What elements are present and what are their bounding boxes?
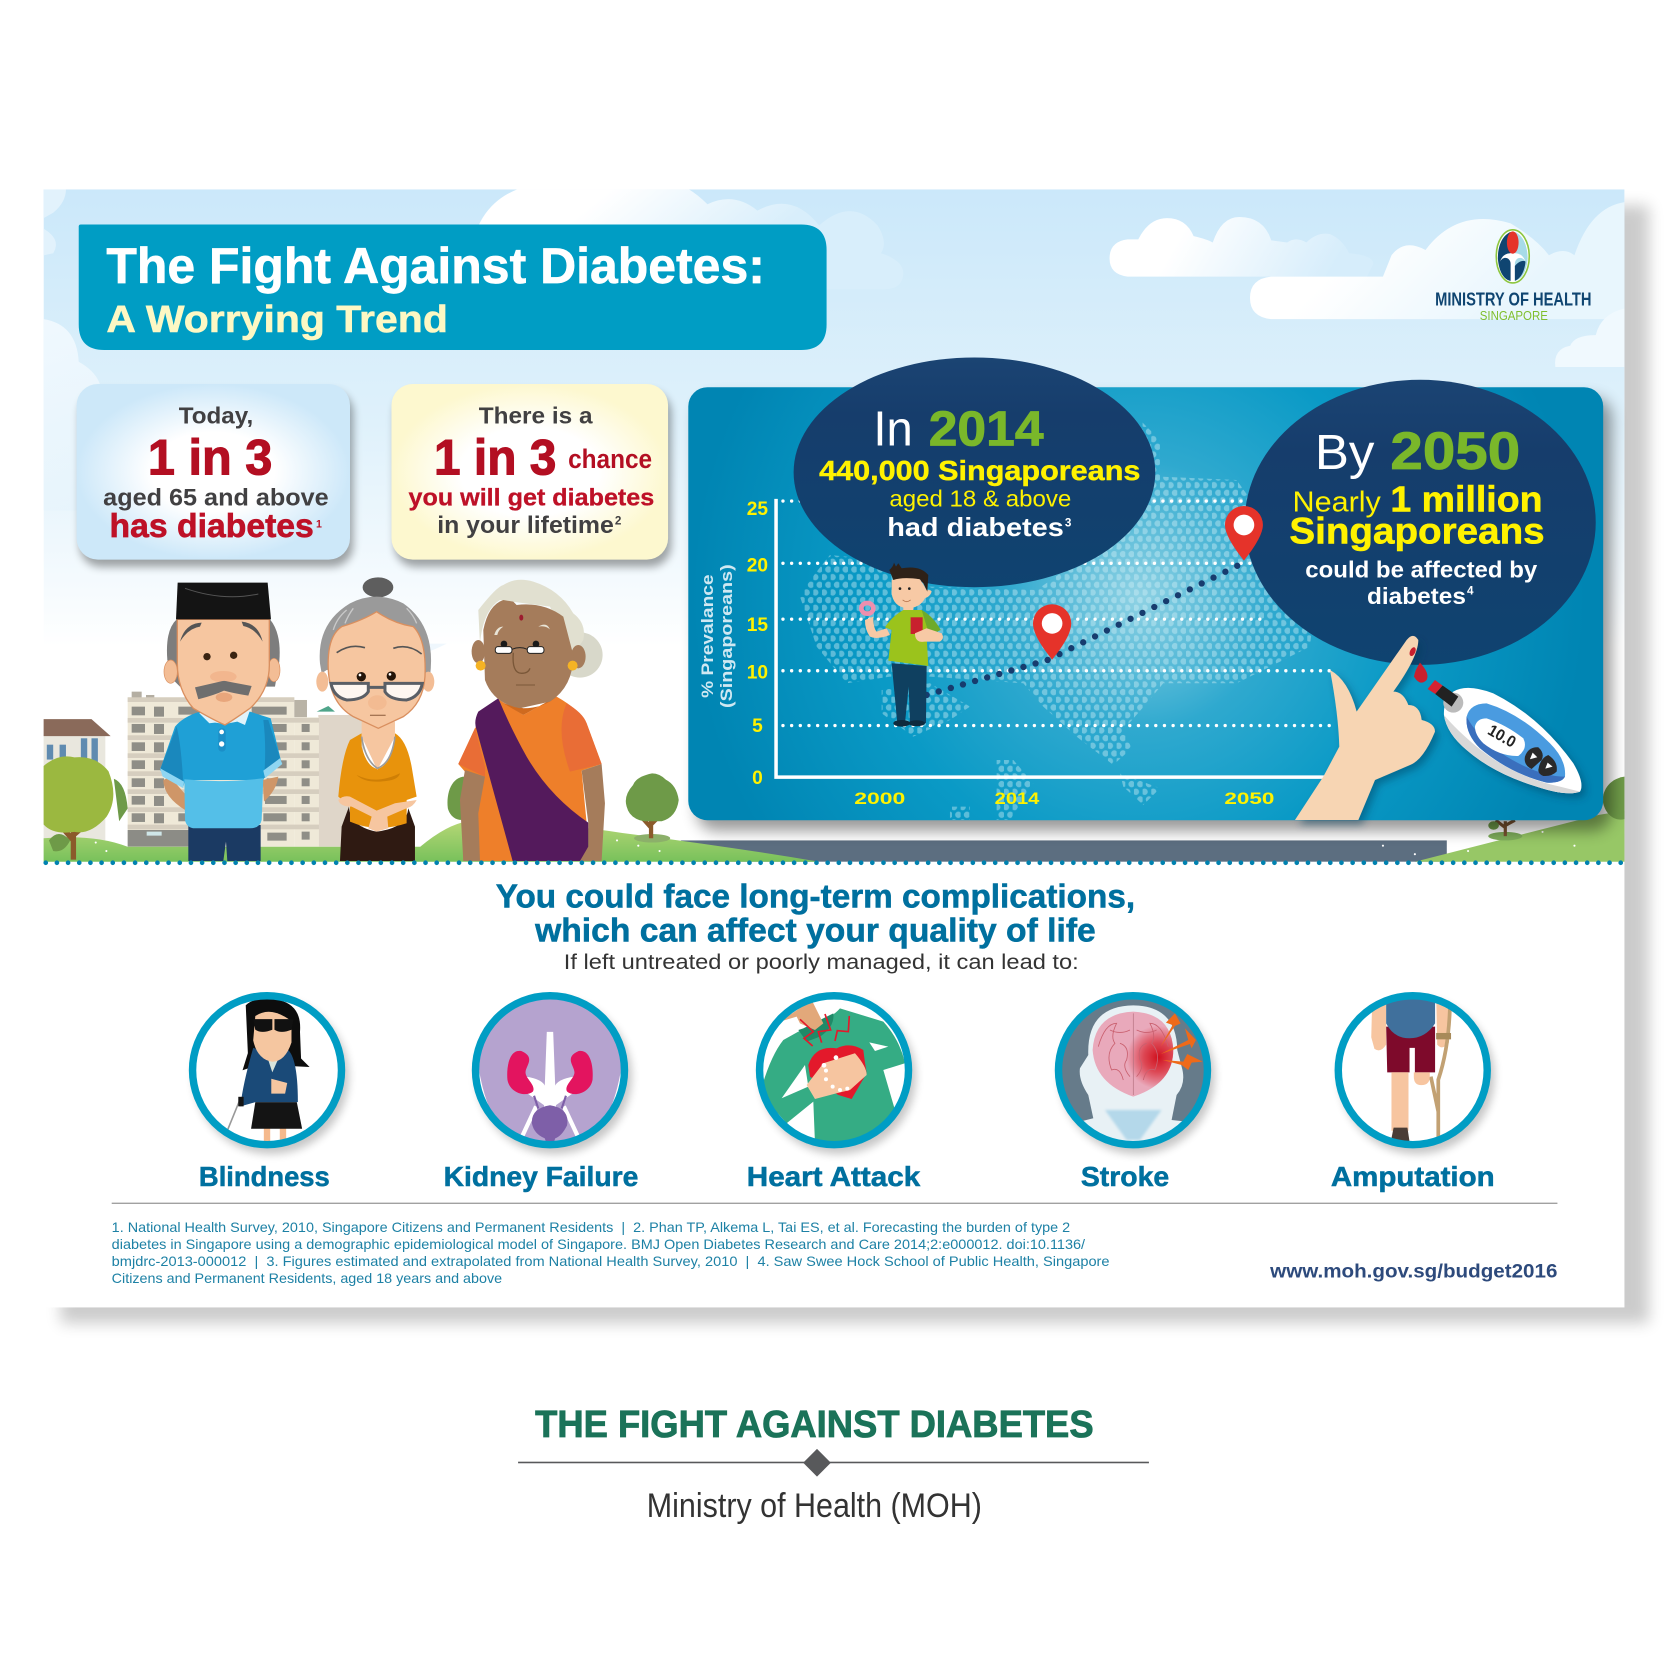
callout: By 2050 <box>1245 380 1596 665</box>
trend line <box>927 566 1238 695</box>
pin: 2050 <box>1225 506 1263 561</box>
poster card <box>44 189 1624 1307</box>
icon: kidneys and bladder <box>476 1032 624 1147</box>
fingernail <box>1408 646 1417 657</box>
footnotes: Citizens and Permanent Residents, aged 18 years and above <box>112 1270 502 1286</box>
x axis labels: 2014 <box>995 789 1040 808</box>
tree: right small <box>1488 820 1522 840</box>
callout: By 2050: could be affected by <box>1305 557 1537 583</box>
title text: The Fight Against Diabetes: <box>106 238 765 294</box>
stat card: 1 in 3 chance: chance <box>568 444 652 474</box>
x axis labels <box>854 789 1274 808</box>
logo text: MINISTRY OF HEALTH <box>1435 289 1591 309</box>
y axis title <box>698 564 736 708</box>
subheading: If left untreated or poorly managed, it can lead to: <box>564 950 1079 974</box>
heading: complications: which can affect your quality of life <box>534 911 1096 948</box>
caption title: THE FIGHT AGAINST DIABETES <box>535 1403 1094 1446</box>
tree: small behind woman <box>447 777 465 820</box>
background buildings and road <box>44 692 1447 862</box>
caption divider with diamond <box>518 1449 1149 1477</box>
glucose meter: 10.0 <box>1485 722 1519 751</box>
label: Kidney Failure <box>444 1161 638 1192</box>
callout: By 2050: Singaporeans <box>1289 510 1545 552</box>
road <box>681 840 1447 862</box>
building: house <box>44 719 111 840</box>
dotted world map <box>800 420 1317 820</box>
subtitle text: A Worrying Trend <box>106 298 448 341</box>
y axis labels: 5 <box>752 716 763 737</box>
stat card: 1 in 3 chance: you will get diabetes <box>409 484 654 511</box>
stat card: today 1 in 3: Today, <box>179 402 253 428</box>
heading: complications <box>496 877 1135 948</box>
stat card: 1 in 3 chance <box>391 384 671 567</box>
heading: complications: You could face long-term complications, <box>496 877 1135 914</box>
hand <box>1295 636 1435 820</box>
label: Stroke <box>1081 1161 1169 1192</box>
callout: In 2014 <box>794 357 1155 587</box>
icon: brain and head <box>1080 1005 1203 1147</box>
y axis labels: 20 <box>747 555 768 576</box>
callout: By 2050: diabetes <box>1367 583 1466 609</box>
icon: leg with crutch <box>1371 994 1451 1149</box>
complication: blindness <box>193 996 349 1192</box>
complication: kidney failure <box>444 996 638 1192</box>
character: boy with donut and soda <box>861 563 943 727</box>
stat card: 1 in 3 chance: 2 <box>615 514 622 527</box>
footnotes: diabetes in Singapore using a demographic epidemiological model of Singapore. BMJ Open Diabetes Research and Care 2014;2:e000012. doi:10.1136/ <box>112 1236 1085 1252</box>
x axis labels: 2000 <box>854 789 905 808</box>
label: Heart Attack <box>747 1161 921 1192</box>
callout: By 2050: 2050 <box>1390 422 1520 481</box>
y axis title: (Singaporeans) <box>717 564 736 708</box>
sky background with clouds <box>44 190 1624 651</box>
panel shadow <box>697 398 1612 831</box>
logo sub text: SINGAPORE <box>1480 308 1548 323</box>
character: elderly Indian woman <box>458 580 605 861</box>
stat card: 1 in 3 chance: 1 in 3 <box>434 429 556 485</box>
stat card: 1 in 3 chance: in your lifetime <box>437 512 614 539</box>
stat card: today 1 in 3: 1 <box>316 519 322 531</box>
callout: By 2050: By <box>1315 426 1375 480</box>
callout: By 2050: 1 million <box>1390 479 1543 520</box>
tree: large left <box>44 756 128 860</box>
callout: In 2014: 2014 <box>929 403 1044 457</box>
chart grid lines <box>783 501 1336 726</box>
callout: In 2014: had diabetes <box>887 514 1064 542</box>
icon: woman with cane <box>228 999 310 1147</box>
stat card: 1 in 3 chance: There is a <box>479 402 594 428</box>
callout: In 2014: aged 18 & above <box>889 485 1071 511</box>
decorative dotted divider <box>46 861 1624 865</box>
tree: small middle <box>626 773 679 843</box>
trees <box>44 756 1624 860</box>
caption source: Ministry of Health (MOH) <box>647 1487 982 1525</box>
complication: heart attack <box>747 996 921 1192</box>
logo: Ministry of Health <box>1435 230 1591 323</box>
title banner <box>79 224 827 350</box>
stat card: today 1 in 3: has diabetes <box>110 507 314 544</box>
label: Amputation <box>1331 1161 1495 1192</box>
y axis labels: 15 <box>747 615 768 636</box>
y axis title: % Prevalance <box>698 574 717 698</box>
callout: By 2050: Nearly <box>1293 487 1382 519</box>
building: flats <box>128 692 363 847</box>
character: elderly Chinese woman <box>316 577 434 861</box>
illustration: hand with glucose meter <box>1295 636 1581 820</box>
callout: In 2014: 3 <box>1065 517 1072 530</box>
complication: stroke <box>1058 996 1215 1192</box>
complication: amputation <box>1331 994 1495 1192</box>
tree: right edge <box>1603 777 1624 820</box>
pin: 2014 <box>1033 604 1071 660</box>
stat card: today 1 in 3 <box>77 384 353 567</box>
callout: In 2014: In <box>873 403 913 457</box>
callout: In 2014: 440,000 Singaporeans <box>819 455 1140 486</box>
stat card: today 1 in 3: aged 65 and above <box>103 484 329 511</box>
label: Blindness <box>199 1161 330 1192</box>
footnotes <box>112 1219 1110 1286</box>
chart axes <box>776 499 1335 777</box>
card drop shadow <box>61 205 1649 1323</box>
y axis labels: 25 <box>747 499 768 520</box>
icon: chest and heart <box>760 1000 905 1143</box>
footnotes: bmjdrc-2013-000012 | 3. Figures estimated and extrapolated from National Health Survey, 2010 | 4. Saw Swee Hock School of Public Health, Singapore <box>112 1253 1110 1269</box>
stat card: today 1 in 3: 1 in 3 <box>148 429 272 485</box>
y axis labels: 0 <box>752 768 763 789</box>
ground: hills <box>44 811 1624 862</box>
glucose meter <box>1435 686 1581 793</box>
character: elderly man <box>160 583 282 861</box>
panel: prevalence chart <box>688 387 1603 820</box>
x axis labels: 2050 <box>1224 789 1274 808</box>
icon: MOH emblem <box>1496 230 1529 283</box>
y axis labels: 10 <box>747 663 768 684</box>
y axis labels <box>747 499 768 789</box>
callout: By 2050: 4 <box>1467 585 1474 598</box>
footnotes: 1. National Health Survey, 2010, Singapore Citizens and Permanent Residents | 2. Phan TP, Alkema L, Tai ES, et al. Forecasting the burden of type 2 <box>112 1219 1070 1235</box>
test strip <box>1428 680 1458 707</box>
website url: www.moh.gov.sg/budget2016 <box>1269 1262 1557 1283</box>
blood drop <box>1414 663 1427 683</box>
